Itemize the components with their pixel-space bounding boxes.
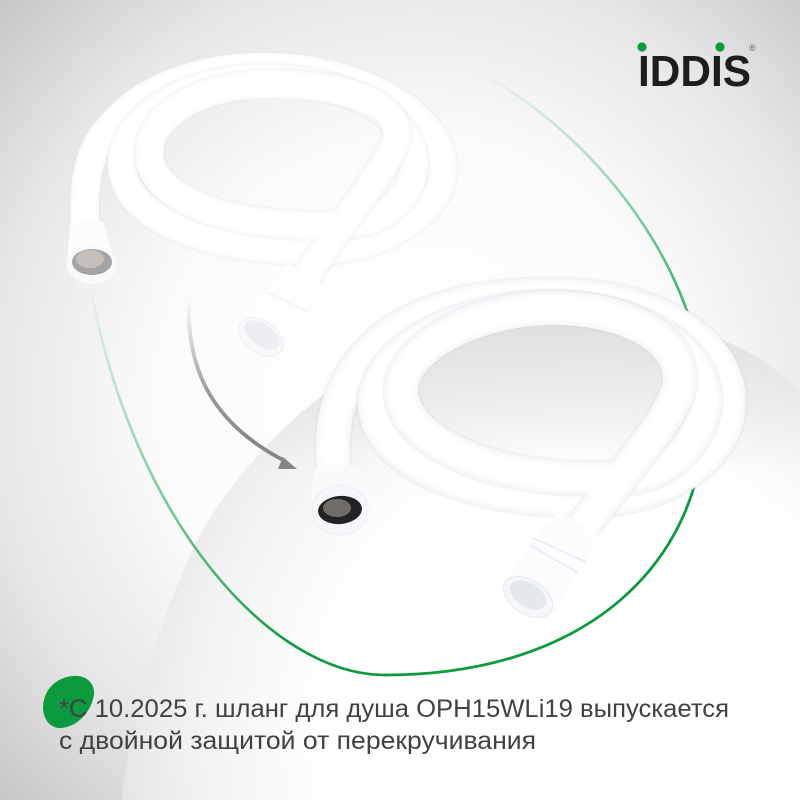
logo IDDIS: ®: [749, 43, 756, 53]
lower right connector: [496, 512, 600, 626]
logo IDDIS: IDDIS: [638, 47, 751, 96]
upper left connector: [67, 222, 117, 284]
transition arrow: [189, 298, 297, 469]
lower hose: [333, 295, 729, 528]
green ring arc: [92, 72, 705, 675]
green blob behind note: [43, 676, 94, 728]
lower left connector with black insert: [312, 465, 368, 535]
footnote text: *С 10.2025 г. шланг для душа OPH15WLi19 выпускается: [59, 695, 729, 723]
footnote text: [59, 695, 729, 755]
upper right connector: [231, 263, 325, 364]
footnote text: с двойной защитой от перекручивания: [59, 727, 536, 755]
background blob: [122, 318, 800, 800]
upper hose: [85, 67, 443, 288]
